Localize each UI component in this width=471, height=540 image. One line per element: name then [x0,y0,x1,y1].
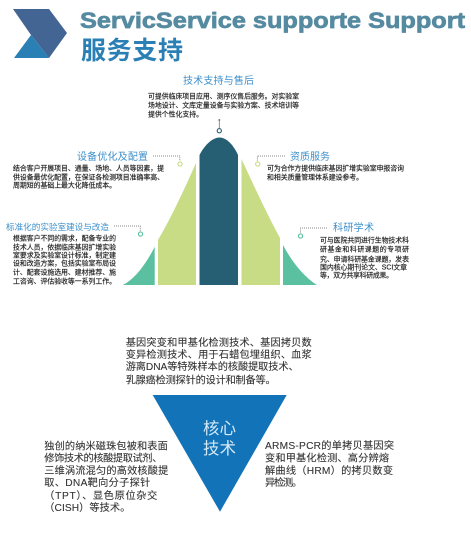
description: 技术人员，依据临床基因扩增实验 [13,242,116,252]
text block: detection technologies: 乳腺癌检测探针的设计和制备等。 [126,374,276,386]
description: 计、配套设施选用、建材推荐、施 [13,268,116,276]
title: English: ServicService supporte Support [80,8,466,33]
leader marker [298,228,327,238]
triangle label: 核心 [203,420,236,438]
description: 根据客户不同的需求，配备专业的 [13,234,116,242]
text block: nucleic acid extraction [44,440,168,514]
triangle label: 技术 [203,440,236,458]
description: 设和改造方案，包括实验室布局设 [13,258,116,268]
description [320,236,409,280]
heading: 标准化的实验室建设与改造 [6,221,109,232]
text block: nucleic acid extraction: （CISH）等技术。 [44,501,130,514]
description: 研基金和科研课题的专项研 [320,244,409,254]
description: 供设备最优化配置，在保证各检测项目准确率高、 [13,172,164,182]
text block: detection technologies: 游离DNA等特殊样本的核酸提取技术、 [126,360,299,373]
description: 周期短的基础上最大化降低成本。 [13,180,116,190]
core technology triangle [153,395,287,512]
description [148,92,299,118]
description: 等，双方共享科研成果。 [320,270,393,280]
text block: ARMS-PCR: 变和甲基化检测、高分辨熔 [265,452,389,464]
description: 场地设计、文库定量设备与实验方案、技术培训等 [148,100,299,110]
icon: chevron logo [13,9,67,58]
description: 可为合作方提供临床基因扩增实验室申报咨询 [267,164,404,172]
text block: detection technologies: 基因突变和甲基化检测技术、基因拷贝数 [126,336,312,349]
description: 可与医院共同进行生物技术科 [320,236,409,244]
title: Chinese: 服务支持 [81,37,183,65]
text block: nucleic acid extraction: 独创的纳米磁珠包被和表面 [44,440,168,452]
description: 结合客户开展项目、通量、场地、人员等因素，提 [13,164,164,172]
heading: 设备优化及配置 [77,150,148,163]
triangle label [203,420,236,458]
section: scientific research [298,221,409,280]
text block: nucleic acid extraction: 修饰技术的核酸提取试剂、 [44,452,162,464]
description: 究、申请科研基金课题，发表 [320,254,409,264]
heading: 资质服务 [290,150,330,163]
description: 提供个性化支持。 [148,110,203,118]
description: 国内核心期刊论文、SCI文章 [320,262,407,272]
text block: nucleic acid extraction: 取、DNA靶向分子探针 [44,476,150,489]
leader marker [153,156,182,166]
heading: 技术支持与售后 [183,74,254,87]
description: 和相关质量管理体系建设参考。 [267,172,363,182]
description: 可提供临床项目应用、测序仪售后服务。对实验室 [148,92,299,100]
section: standard laboratory construction [6,221,143,286]
description: 工咨询、评估验收等一系列工作。 [13,276,116,286]
text block: nucleic acid extraction: （TPT）、显色原位杂交 [44,489,157,502]
description [13,164,164,190]
text block: ARMS-PCR: 解曲线（HRM）的拷贝数变 [265,464,393,477]
description: 室要求及实验室设计标准，制定建 [13,250,116,260]
text block: detection technologies: 变异检测技术、用于石蜡包埋组织、血浆 [126,348,312,361]
leader marker [256,156,285,166]
description [267,164,404,182]
text block: detection technologies [126,336,312,386]
text block: nucleic acid extraction: 三维涡流混匀的高效核酸提 [44,464,168,477]
section: equipment optimisation [13,150,182,190]
text block: ARMS-PCR [265,439,394,489]
leader marker [114,226,143,236]
section: qualification services [256,150,404,182]
bell curve chart [123,138,317,285]
text block: ARMS-PCR: ARMS-PCR的单拷贝基因突 [265,439,394,452]
leader marker [217,119,221,133]
section: technical support [148,74,299,133]
heading: 科研学术 [333,221,374,234]
text block: ARMS-PCR: 异检测。 [265,476,302,489]
description [13,234,116,286]
